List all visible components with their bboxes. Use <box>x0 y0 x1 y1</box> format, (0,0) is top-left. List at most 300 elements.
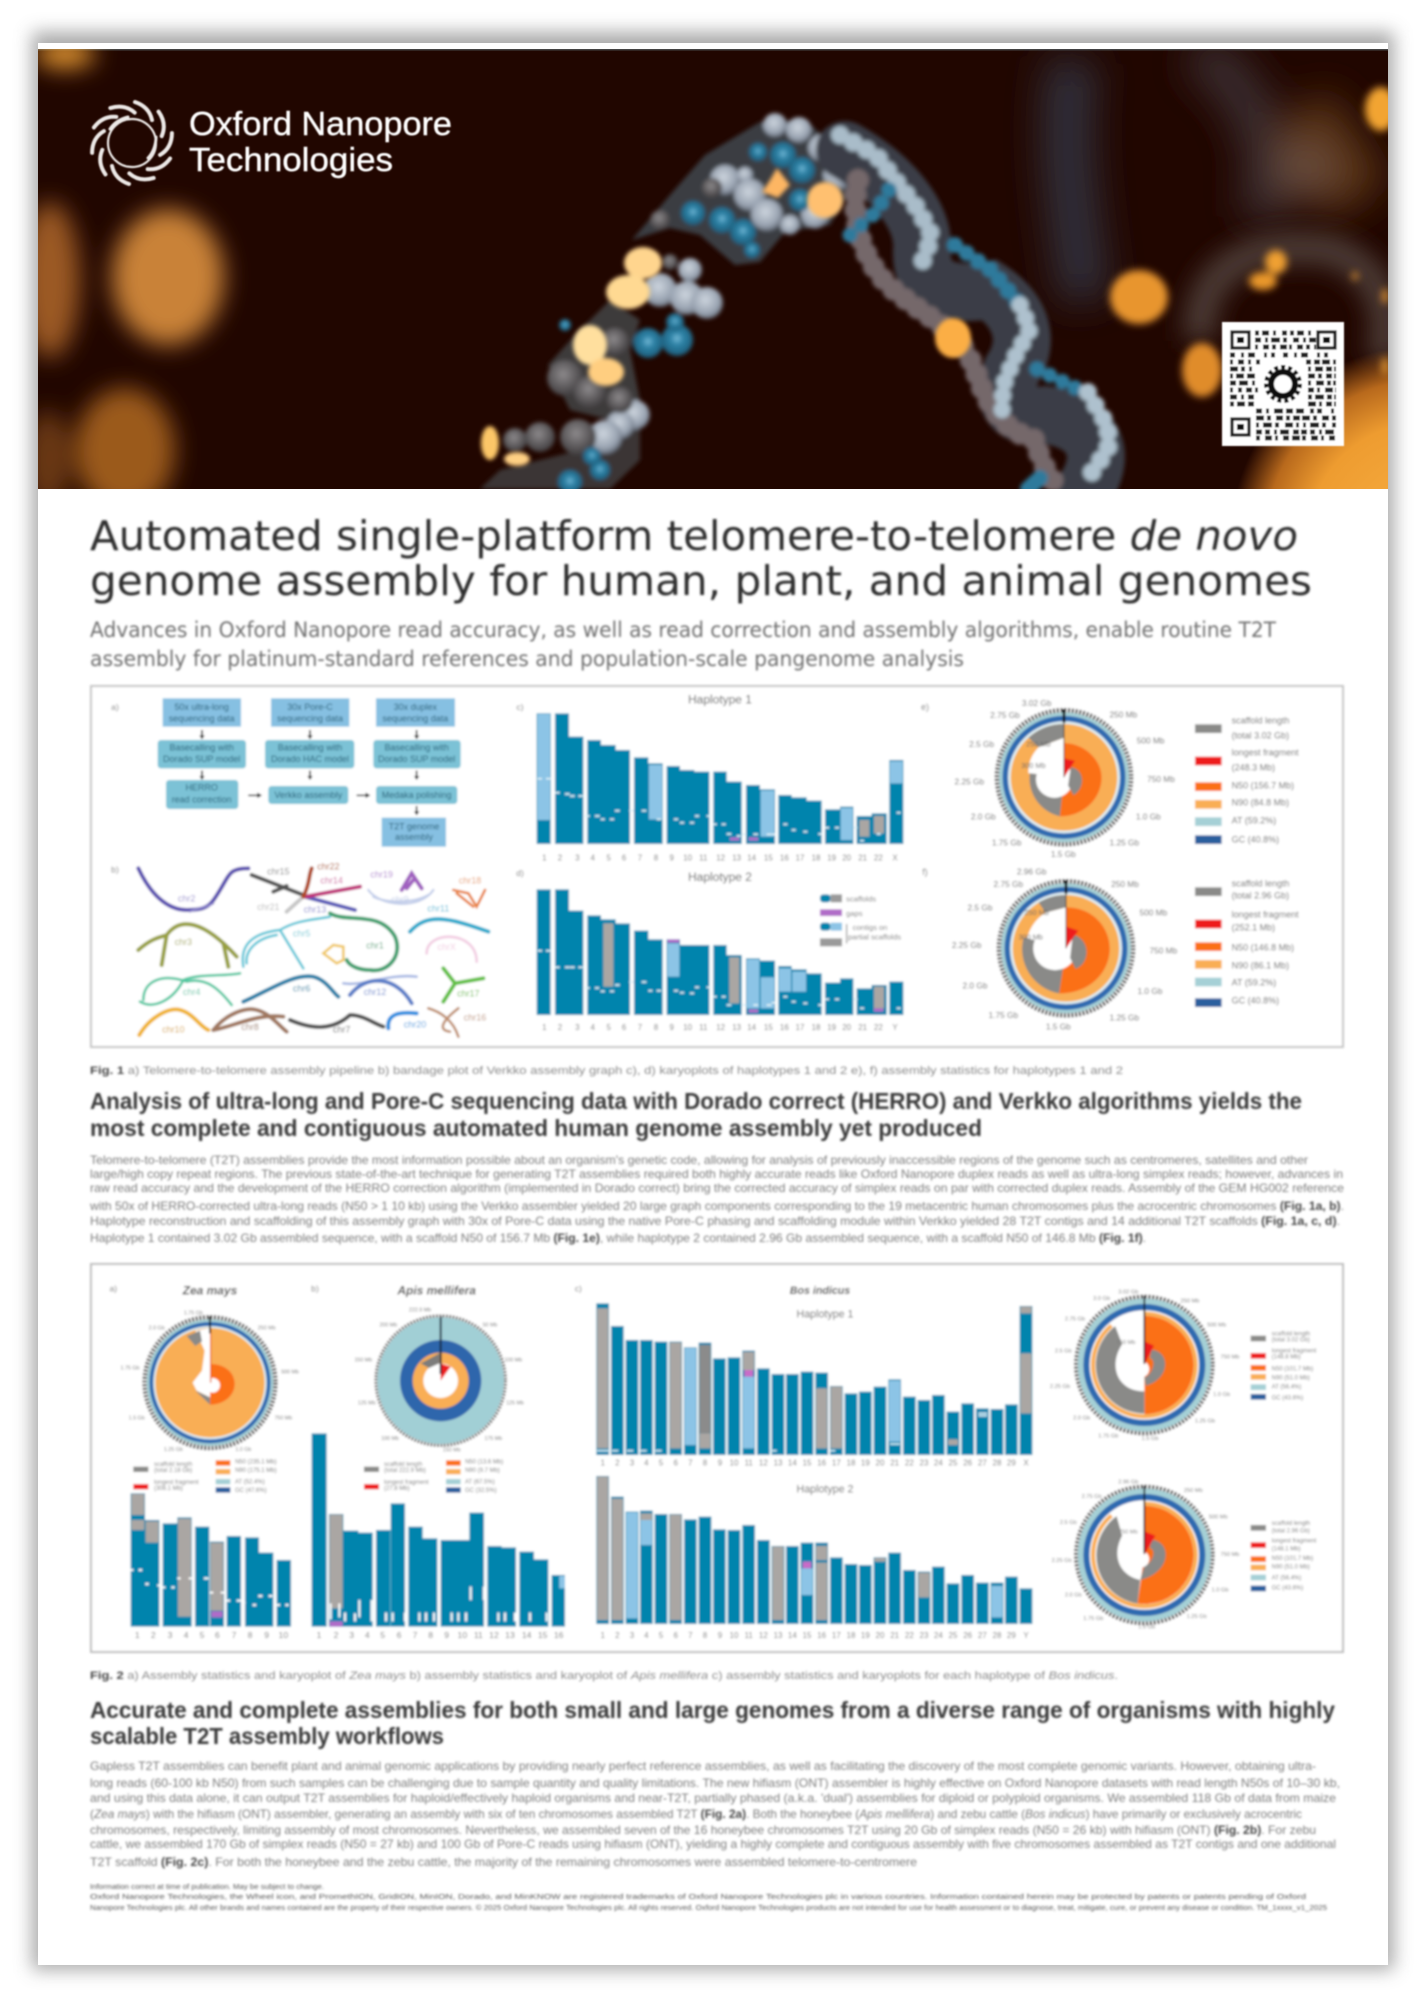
chart: karyoplot haplotype 1: 1 <box>542 854 547 863</box>
karyoplot Bos haplotype 2: 14 <box>788 1631 797 1640</box>
karyoplot Zea mays: 7 <box>232 1630 237 1640</box>
chart: karyoplot haplotype 2: 21 <box>858 1023 868 1032</box>
panel: Bos indicus snail plots: 2.0 Gb <box>1065 1593 1082 1599</box>
karyoplot Zea mays: 1 <box>135 1630 140 1640</box>
panel: Apis mellifera: b) <box>311 1284 319 1294</box>
chart: karyoplot haplotype 2: Y <box>892 1023 898 1032</box>
chart: karyoplot haplotype 2: 16 <box>780 1023 789 1032</box>
panel: Apis mellifera: 125 Mb <box>506 1401 524 1407</box>
chart: assembly statistics haplotype 1: 2.75 Gb <box>990 710 1020 720</box>
chart: karyoplot haplotype 2: Haplotype 2 <box>688 870 752 884</box>
chart: karyoplot haplotype 1 <box>516 692 903 863</box>
panel: Bos indicus snail plots: 250 Mb <box>1181 1299 1199 1305</box>
karyoplot Apis mellifera: 4 <box>365 1630 370 1640</box>
karyoplot legend: gaps <box>846 909 863 918</box>
legend Bos haplotype 2: (148.1 Mb) <box>1272 1547 1301 1553</box>
chart: karyoplot haplotype 1: X <box>892 854 898 863</box>
panel: figure 1 <box>91 686 1343 1047</box>
panel: Apis mellifera: 175 Mb <box>484 1436 502 1442</box>
panel: Bos indicus snail plots <box>1050 1289 1317 1631</box>
karyoplot Bos haplotype 2: 21 <box>890 1631 900 1640</box>
legend Bos haplotype 1: (148.8 Mb) <box>1272 1355 1301 1361</box>
panel: Apis mellifera: 100 Mb <box>504 1357 522 1363</box>
legend Apis mellifera: GC (32.5%) <box>465 1488 497 1494</box>
karyoplot Apis mellifera: 8 <box>428 1630 433 1640</box>
chart: assembly statistics haplotype 2: 2.5 Gb <box>967 902 993 912</box>
panel: Bos indicus snail plots: 3.02 Gb <box>1118 1289 1138 1295</box>
legend Bos haplotype 1: N90 (51.0 Mb) <box>1272 1375 1310 1381</box>
legend Apis mellifera: AT (67.5%) <box>465 1479 495 1485</box>
karyoplot Bos haplotype 2: 1 <box>600 1631 605 1640</box>
karyoplot Bos haplotype 2: Y <box>1023 1631 1029 1640</box>
panel: bandage plot: chr12 <box>364 987 386 997</box>
legend Bos haplotype 1: GC (43.6%) <box>1272 1395 1303 1401</box>
legend Zea mays: (308.1 Mb) <box>154 1486 183 1492</box>
panel: Apis mellifera: 100 Mb <box>381 1436 399 1442</box>
hero banner <box>38 49 1388 489</box>
karyoplot Bos haplotype 2: 27 <box>978 1631 987 1640</box>
panel: Bos indicus snail plots: 750 Mb <box>1119 1529 1138 1535</box>
legend Bos haplotype 1 <box>1251 1331 1317 1401</box>
legend haplotype 1: longest fragment <box>1232 748 1299 758</box>
section heading: diverse organisms: scalable T2T assembly workflows <box>90 1723 444 1749</box>
karyoplot Bos haplotype 1: 23 <box>920 1458 929 1467</box>
karyoplot Bos haplotype 2: 2 <box>615 1631 620 1640</box>
karyoplot Bos haplotype 1: 3 <box>630 1458 635 1467</box>
chart: assembly statistics haplotype 1: 750 Mb <box>1147 774 1175 784</box>
snail plot Bos haplotype 2 <box>1076 1486 1212 1623</box>
legend haplotype 1: N50 (156.7 Mb) <box>1232 780 1294 790</box>
karyoplot Bos haplotype 1: 19 <box>861 1458 870 1467</box>
DNA helix <box>480 113 1108 494</box>
karyoplot Zea mays: 9 <box>264 1630 269 1640</box>
karyoplot Zea mays <box>129 1493 291 1640</box>
panel: Apis mellifera: 150 Mb <box>354 1357 372 1363</box>
chart: assembly statistics haplotype 2: 250 Mb <box>1024 908 1049 917</box>
karyoplot Bos haplotype 2: 11 <box>745 1631 753 1640</box>
karyoplot legend: contigs on <box>853 923 888 932</box>
chart: assembly statistics haplotype 2: 1.0 Gb <box>1137 986 1163 996</box>
chart: assembly statistics haplotype 2 <box>952 867 1299 1032</box>
karyoplot Bos haplotype 1: 16 <box>817 1458 827 1467</box>
karyoplot Zea mays: 4 <box>184 1630 189 1640</box>
panel: bandage plot: chr13 <box>304 905 326 915</box>
body text: diverse organisms: and using this data alone, it can output T2T assemblies for haploid/effectively haploid organisms and near-T2T, partially phased (a.k.a. 'dual') assemblies for diploid or polyploid organisms. We assembled 118 Gb of data from maize <box>90 1791 1336 1805</box>
bokeh lights <box>20 40 224 512</box>
legend haplotype 2 <box>1195 879 1299 1007</box>
chart: karyoplot haplotype 2: 1 <box>542 1023 547 1032</box>
panel: Bos indicus snail plots: 2.5 Gb <box>1055 1349 1072 1355</box>
snail plot haplotype 2 <box>999 880 1133 1015</box>
chart: karyoplot haplotype 2: 3 <box>575 1023 580 1032</box>
karyoplot Bos haplotype 2 <box>596 1476 1032 1640</box>
helix body shadow <box>632 120 850 265</box>
body text: diverse organisms: (Zea mays) with the hifiasm (ONT) assembler, generating an assembly with six of ten chromosomes assembled T2T (Fig. 2a). Both the honeybee (Apis mellifera) and zebu cattle (Bos indicus) have primarily or exclusively acrocentric <box>90 1807 1302 1821</box>
legend Zea mays: longest fragment <box>154 1480 199 1486</box>
chart: karyoplot haplotype 1: 9 <box>669 854 674 863</box>
karyoplot Bos haplotype 1: 24 <box>934 1458 943 1467</box>
panel: bandage plot: b) <box>111 865 119 875</box>
karyoplot Bos haplotype 1: 8 <box>703 1458 708 1467</box>
chart: karyoplot haplotype 2: 20 <box>842 1023 852 1032</box>
chart: karyoplot haplotype 2: 4 <box>590 1023 595 1032</box>
karyoplot Bos haplotype 2: 22 <box>905 1631 914 1640</box>
karyoplot legend: partial scaffolds <box>848 932 901 941</box>
chart: assembly statistics haplotype 1: 1.5 Gb <box>1051 849 1076 859</box>
panel: Apis mellifera: 150 Mb <box>443 1447 461 1453</box>
body text: diverse organisms: Gapless T2T assemblies can benefit plant and animal genomic applications by providing nearly perfect reference assemblies, as well as facilitating the discovery of the most complete genomic variants. However, obtaining ultra- <box>90 1759 1316 1773</box>
panel: Bos indicus snail plots: 1.75 Gb <box>1098 1434 1118 1440</box>
legend haplotype 1: AT (59.2%) <box>1232 815 1276 825</box>
subtitle: assembly for platinum-standard references and population-scale pangenome analysis <box>90 647 964 671</box>
panel: Bos indicus snail plots: 2.75 Gb <box>1065 1317 1085 1323</box>
legend haplotype 1 <box>1195 715 1299 845</box>
karyoplot Bos haplotype 2: 17 <box>832 1631 841 1640</box>
legend haplotype 1: (total 3.02 Gb) <box>1232 730 1289 740</box>
legend Apis mellifera: (27.8 Mb) <box>384 1486 410 1492</box>
legend haplotype 2: longest fragment <box>1232 910 1299 920</box>
panel: bandage plot: chr3 <box>175 937 192 947</box>
chart: karyoplot haplotype 1: 15 <box>764 854 773 863</box>
panel: assembly pipeline flowchart: Basecalling with <box>384 743 449 753</box>
panel: bandage plot: chr18 <box>459 875 481 885</box>
karyoplot Bos haplotype 2: 7 <box>688 1631 693 1640</box>
body text: human genome assembly: raw read accuracy and the development of the HERRO correction algorithm (implemented in Dorado correct) bring the corrected accuracy of simplex reads on par with corrected duplex reads. Assembly of the GEM HG002 reference <box>90 1181 1344 1195</box>
panel: Zea mays: 1.75 Gb <box>184 1310 203 1316</box>
panel: Bos indicus snail plots: 1.5 Gb <box>1138 1625 1155 1631</box>
logo <box>87 98 452 188</box>
panel: Bos indicus snail plots: 1.0 Gb <box>1212 1587 1228 1593</box>
snail plot haplotype 1 <box>997 709 1131 844</box>
karyoplot Bos haplotype 2: 23 <box>920 1631 929 1640</box>
karyoplot Apis mellifera: 1 <box>317 1630 322 1640</box>
karyoplot Bos haplotype 2: 16 <box>817 1631 827 1640</box>
body text: diverse organisms: long reads (60-100 kb N50) from such samples can be challenging due to sample quantity and quality limitations. The new hifiasm (ONT) assembler is highly effective on Oxford Nanopore datasets with read length N50s of 10–30 kb, <box>90 1776 1340 1790</box>
snail plot Apis mellifera <box>376 1316 505 1445</box>
panel: assembly pipeline flowchart: HERRO <box>185 783 218 793</box>
karyoplot Bos haplotype 1: 28 <box>993 1458 1002 1467</box>
legend Bos haplotype 1: N50 (101.7 Mb) <box>1272 1367 1313 1373</box>
chart: karyoplot haplotype 1: 7 <box>638 854 643 863</box>
logo wordmark: Technologies <box>189 141 393 178</box>
legend Bos haplotype 2: scaffold length <box>1272 1521 1310 1527</box>
karyoplot legend <box>820 894 901 946</box>
chart: karyoplot haplotype 1: 20 <box>842 854 852 863</box>
panel: Bos indicus snail plots: 1.0 Gb <box>1213 1392 1230 1398</box>
karyoplot Bos haplotype 2: 9 <box>718 1631 723 1640</box>
karyoplot Bos haplotype 1: 7 <box>688 1458 693 1467</box>
body text: human genome assembly: Haplotype 1 contained 3.02 Gb assembled sequence, with a scaffold N50 of 156.7 Mb (Fig. 1e), while haplotype 2 contained 2.96 Gb assembled sequence, with a scaffold N50 of 146.8 Mb (Fig. 1f). <box>90 1231 1146 1245</box>
panel: Apis mellifera: 50 Mb <box>483 1323 497 1329</box>
panel: assembly pipeline flowchart: Dorado HAC model <box>271 754 349 764</box>
panel: Bos indicus snail plots: 1.25 Gb <box>1187 1614 1207 1620</box>
chart: assembly statistics haplotype 1: 250 Mb <box>1026 739 1051 748</box>
panel: Zea mays: 1.75 Gb <box>121 1365 140 1371</box>
chart: karyoplot haplotype 1: 8 <box>654 854 659 863</box>
legend haplotype 1: scaffold length <box>1232 715 1289 725</box>
karyoplot Bos haplotype 1: 5 <box>659 1458 664 1467</box>
legend haplotype 2: (252.1 Mb) <box>1232 923 1275 933</box>
panel: bandage plot: chr2 <box>178 893 195 903</box>
snail plot Zea mays <box>145 1316 275 1448</box>
karyoplot Apis mellifera: 5 <box>380 1630 385 1640</box>
panel: assembly pipeline flowchart: Medaka polishing <box>382 790 452 800</box>
karyoplot Bos haplotype 1: 18 <box>847 1458 856 1467</box>
panel: assembly pipeline flowchart: Verkko assembly <box>274 790 343 800</box>
chart: karyoplot haplotype 2: 17 <box>796 1023 805 1032</box>
QR code <box>1222 322 1344 446</box>
chart: karyoplot haplotype 2: 12 <box>716 1023 726 1032</box>
panel: bandage plot: chr14 <box>320 875 343 885</box>
panel: Zea mays: 750 Mb <box>274 1415 292 1421</box>
legend Bos haplotype 1: AT (56.4%) <box>1272 1385 1301 1391</box>
legend Apis mellifera <box>364 1459 503 1494</box>
karyoplot Bos haplotype 1: 4 <box>644 1458 649 1467</box>
legend Bos haplotype 1: (total 3.02 Gb) <box>1272 1337 1310 1343</box>
chart: karyoplot haplotype 1: 14 <box>747 854 757 863</box>
karyoplot Bos haplotype 1: 29 <box>1007 1458 1016 1467</box>
panel: Bos indicus snail plots: 2.25 Gb <box>1050 1384 1070 1390</box>
legend Zea mays: AT (52.4%) <box>235 1479 265 1485</box>
chart: karyoplot haplotype 1: 17 <box>796 854 805 863</box>
chart: karyoplot haplotype 2: 5 <box>606 1023 611 1032</box>
karyoplot Bos haplotype 2: 10 <box>730 1631 739 1640</box>
chart: karyoplot haplotype 1: 13 <box>732 854 742 863</box>
panel: bandage plot: chr17 <box>457 989 480 999</box>
legend Bos haplotype 1: longest fragment <box>1272 1349 1317 1355</box>
karyoplot Apis mellifera: 6 <box>397 1630 402 1640</box>
karyoplot Bos haplotype 1: 21 <box>890 1458 900 1467</box>
panel: Zea mays: 500 Mb <box>281 1369 299 1375</box>
chart: assembly statistics haplotype 1: 500 Mb <box>1137 736 1165 746</box>
chart: karyoplot haplotype 2 <box>516 868 903 1032</box>
panel: Bos indicus snail plots: 750 Mb <box>1221 1354 1239 1360</box>
karyoplot Bos haplotype 2: 6 <box>673 1631 678 1640</box>
karyoplot Apis mellifera: 15 <box>538 1630 548 1640</box>
legend Apis mellifera: (total 222.9 Mb) <box>384 1468 426 1474</box>
legend Apis mellifera: N50 (13.6 Mb) <box>465 1459 503 1465</box>
karyoplot Apis mellifera: 2 <box>334 1630 339 1640</box>
chart: karyoplot haplotype 1: 19 <box>827 854 837 863</box>
panel: assembly pipeline flowchart: sequencing data <box>169 713 235 723</box>
chart: assembly statistics haplotype 1: 1.25 Gb <box>1110 837 1140 847</box>
chart: karyoplot haplotype 2: 14 <box>747 1023 757 1032</box>
section heading: diverse organisms: Accurate and complete assemblies for both small and large genomes from a diverse range of organisms with highly <box>90 1697 1335 1723</box>
panel: Zea mays: 1.5 Gb <box>129 1415 145 1421</box>
panel: Bos indicus snail plots: 1.5 Gb <box>1142 1436 1158 1442</box>
legend Zea mays: GC (47.6%) <box>235 1488 267 1494</box>
panel: assembly pipeline flowchart: read correction <box>172 795 232 805</box>
panel: assembly pipeline flowchart: assembly <box>395 832 433 842</box>
karyoplot Apis mellifera: 7 <box>413 1630 418 1640</box>
panel: bandage plot: chr19 <box>370 870 393 880</box>
panel: bandage plot: chr9 <box>391 895 409 905</box>
chart: assembly statistics haplotype 2: 250 Mb <box>1111 879 1139 889</box>
chart: karyoplot haplotype 1: 11 <box>699 854 708 863</box>
panel: Bos indicus karyoplots: Bos indicus <box>790 1285 850 1297</box>
karyoplot Bos haplotype 2: 25 <box>949 1631 958 1640</box>
karyoplot Bos haplotype 1: 12 <box>759 1458 768 1467</box>
karyoplot Bos haplotype 2: 20 <box>876 1631 885 1640</box>
karyoplot Zea mays: 8 <box>248 1630 253 1640</box>
chart: assembly statistics haplotype 2: 2.96 Gb <box>1017 867 1047 877</box>
karyoplot Bos haplotype 2: 13 <box>774 1631 783 1640</box>
footer legal text: Information correct at time of publication. May be subject to change. <box>90 1884 324 1891</box>
panel: assembly pipeline flowchart: 30x duplex <box>394 702 438 712</box>
chart: karyoplot haplotype 1: 12 <box>716 854 726 863</box>
panel: assembly pipeline flowchart: sequencing data <box>382 713 448 723</box>
karyoplot Bos haplotype 1: 22 <box>905 1458 914 1467</box>
panel: Zea mays: a) <box>109 1284 117 1294</box>
panel: Zea mays <box>109 1284 299 1640</box>
panel: Bos indicus snail plots: 750 Mb <box>1221 1552 1239 1558</box>
legend Apis mellifera: scaffold length <box>384 1462 422 1468</box>
karyoplot Apis mellifera: 12 <box>489 1630 499 1640</box>
body text: diverse organisms: chromosomes, respectively, limiting assembly of most chromosomes. Nevertheless, we assembled seven of the 16 honeybee chromosomes T2T using 20 Gb of simplex reads (N50 = 26 kb) with hifiasm (ONT) (Fig. 2b). For zebu <box>90 1823 1316 1837</box>
chart: karyoplot haplotype 2: 19 <box>827 1023 837 1032</box>
panel: Bos indicus snail plots: 250 Mb <box>1184 1488 1203 1494</box>
karyoplot Apis mellifera <box>312 1433 565 1640</box>
panel: Bos indicus snail plots: 3.0 Gb <box>1093 1296 1110 1302</box>
panel: assembly pipeline flowchart: sequencing data <box>277 713 343 723</box>
chart: assembly statistics haplotype 1: 1.0 Gb <box>1136 812 1161 822</box>
legend Zea mays: (total 2.18 Gb) <box>154 1468 192 1474</box>
panel: Zea mays: 250 Mb <box>258 1325 276 1331</box>
panel: bandage plot: chr20 <box>404 1020 426 1030</box>
logo wordmark: Oxford Nanopore <box>189 105 452 142</box>
body text: diverse organisms: cattle, we assembled 170 Gb of simplex reads (N50 = 27 kb) and 100 Gb of Pore-C reads using hifiasm (ONT), yielding a highly complete and contiguous assembly with five chromosomes assembled as T2T contigs and one additional <box>90 1837 1336 1851</box>
legend haplotype 2: GC (40.8%) <box>1232 995 1279 1005</box>
karyoplot Apis mellifera: 14 <box>522 1630 532 1640</box>
chart: assembly statistics haplotype 2: 1.25 Gb <box>1110 1012 1140 1022</box>
panel: Bos indicus snail plots: 1.25 Gb <box>1195 1419 1215 1425</box>
karyoplot Bos haplotype 1: 17 <box>832 1458 841 1467</box>
logo mark <box>87 98 177 188</box>
panel: bandage plot: chr16 <box>464 1013 486 1023</box>
chart: karyoplot haplotype 2: 2 <box>558 1023 563 1032</box>
chart: karyoplot haplotype 1: 6 <box>622 854 627 863</box>
chart: karyoplot haplotype 2: 8 <box>654 1023 659 1032</box>
legend Bos haplotype 1: scaffold length <box>1272 1331 1310 1337</box>
panel: figure 2 <box>91 1264 1343 1652</box>
karyoplot Bos haplotype 1: 26 <box>963 1458 973 1467</box>
legend Bos haplotype 2: AT (56.4%) <box>1272 1575 1301 1581</box>
karyoplot Bos haplotype 2: 4 <box>644 1631 649 1640</box>
chart: karyoplot haplotype 2: 15 <box>764 1023 773 1032</box>
figure 2 caption: Fig. 2 a) Assembly statistics and karyoplot of Zea mays b) assembly statistics and karyoplot of Apis mellifera c) assembly statistics and karyoplots for each haplotype of Bos indicus . <box>90 1670 1118 1682</box>
chart: assembly statistics haplotype 2: 2.0 Gb <box>962 981 988 991</box>
karyoplot Zea mays: 6 <box>215 1630 220 1640</box>
chart: karyoplot haplotype 1: 4 <box>590 854 595 863</box>
legend haplotype 2: scaffold length <box>1232 879 1289 889</box>
karyoplot Bos haplotype 2: 19 <box>861 1631 870 1640</box>
karyoplot Bos haplotype 2: 28 <box>993 1631 1002 1640</box>
panel: Bos indicus snail plots: 2.0 Gb <box>1073 1415 1090 1421</box>
panel: Zea mays: Zea mays <box>182 1284 238 1298</box>
title <box>90 512 1312 605</box>
chart: karyoplot haplotype 1: 5 <box>606 854 611 863</box>
panel: Zea mays: 2.0 Gb <box>149 1325 165 1331</box>
legend Bos haplotype 2: GC (43.6%) <box>1272 1585 1303 1591</box>
karyoplot Apis mellifera: 11 <box>474 1630 483 1640</box>
body text: human genome assembly: large/high copy repeat regions. The previous state-of-the-art technique for generating T2T assemblies required both highly accurate reads like Oxford Nanopore duplex reads as well as ultra-long simplex reads; however, advances in <box>90 1167 1343 1181</box>
panel: Bos indicus snail plots: 1.75 Gb <box>1083 1616 1103 1622</box>
karyoplot Apis mellifera: 9 <box>444 1630 449 1640</box>
panel: assembly pipeline flowchart: Basecalling with <box>169 743 234 753</box>
karyoplot Zea mays: 10 <box>279 1630 288 1640</box>
karyoplot Apis mellifera: 10 <box>458 1630 467 1640</box>
panel: bandage plot: chr7 <box>333 1025 350 1035</box>
karyoplot Bos haplotype 1: 27 <box>978 1458 987 1467</box>
body text: diverse organisms: T2T scaffold (Fig. 2c). For both the honeybee and the zebu cattle, the majority of the remaining chromosomes were assembled telomere-to-centromere <box>90 1855 917 1869</box>
karyoplot Bos haplotype 2: Haplotype 2 <box>797 1483 854 1495</box>
chart: karyoplot haplotype 2: 22 <box>874 1023 883 1032</box>
footer legal text <box>90 1884 1327 1912</box>
body text: human genome assembly: with 50x of HERRO-corrected ultra-long reads (N50 > 1 10 kb) using the Verkko assembler yielded 20 large graph components corresponding to the 19 metacentric human chromosomes plus the acrocentric chromosomes (Fig. 1a, b). <box>89 1199 1344 1213</box>
panel: Bos indicus snail plots: 2.75 Gb <box>1082 1494 1102 1500</box>
panel: assembly pipeline flowchart: T2T genome <box>389 821 439 831</box>
panel: bandage plot: chr21 <box>257 902 280 912</box>
chart: karyoplot haplotype 2: 7 <box>638 1023 643 1032</box>
panel: bandage plot: chr6 <box>293 984 310 994</box>
karyoplot Zea mays: 5 <box>200 1630 205 1640</box>
karyoplot Bos haplotype 1: 11 <box>745 1458 753 1467</box>
chart: assembly statistics haplotype 1: 2.25 Gb <box>955 777 985 787</box>
karyoplot Bos haplotype 2: 12 <box>759 1631 768 1640</box>
panel: assembly pipeline flowchart: 50x ultra-long <box>174 702 229 712</box>
legend haplotype 2: N90 (86.1 Mb) <box>1232 960 1289 970</box>
legend haplotype 1: GC (40.8%) <box>1232 835 1279 845</box>
legend Zea mays: N50 (235.1 Mb) <box>235 1459 277 1465</box>
panel: bandage plot: chr5 <box>293 929 310 939</box>
chart: assembly statistics haplotype 1: 2.0 Gb <box>971 812 996 822</box>
karyoplot Bos haplotype 2: 3 <box>630 1631 635 1640</box>
panel: Bos indicus snail plots: 750 Mb <box>1117 1340 1135 1346</box>
legend Bos haplotype 2: (total 2.96 Gb) <box>1272 1528 1310 1534</box>
chart: karyoplot haplotype 1: 16 <box>780 854 789 863</box>
chart: assembly statistics haplotype 1 <box>955 698 1299 859</box>
panel: assembly pipeline flowchart: a) <box>111 702 119 712</box>
chart: assembly statistics haplotype 1: 3.02 Gb <box>1022 698 1052 708</box>
karyoplot Bos haplotype 2: 8 <box>703 1631 708 1640</box>
panel: bandage plot: chr10 <box>162 1025 185 1035</box>
karyoplot Bos haplotype 2: 29 <box>1007 1631 1016 1640</box>
karyoplot Bos haplotype 2: 5 <box>659 1631 664 1640</box>
karyoplot Bos haplotype 2: 15 <box>803 1631 812 1640</box>
chart: karyoplot haplotype 1: 10 <box>683 854 693 863</box>
panel: Bos indicus snail plots: 500 Mb <box>1209 1515 1228 1521</box>
karyoplot Apis mellifera: 13 <box>505 1630 515 1640</box>
chart: karyoplot haplotype 2: 13 <box>732 1023 742 1032</box>
karyoplot Bos haplotype 1: 13 <box>774 1458 783 1467</box>
panel: Zea mays: 1.0 Gb <box>235 1447 251 1453</box>
panel: Bos indicus karyoplots <box>575 1284 1032 1640</box>
subtitle: Advances in Oxford Nanopore read accuracy, as well as read correction and assembly algorithms, enable routine T2T <box>90 618 1276 642</box>
chart: assembly statistics haplotype 1: 2.5 Gb <box>969 739 995 749</box>
body text: human genome assembly <box>89 1153 1344 1245</box>
panel: assembly pipeline flowchart: Dorado SUP model <box>163 754 240 764</box>
figure 1 caption: Fig. 1 a) Telomere-to-telomere assembly pipeline b) bandage plot of Verkko assembly graph c), d) karyoplots of haplotypes 1 and 2 e), f) assembly statistics for haplotypes 1 and 2 <box>90 1065 1123 1077</box>
panel: Apis mellifera: 222.9 Mb <box>409 1307 431 1313</box>
panel: Apis mellifera <box>311 1284 565 1640</box>
chart: karyoplot haplotype 1: 22 <box>874 854 883 863</box>
footer legal text: Nanopore Technologies plc. All other brands and names contained are the property of their respective owners. © 2025 Oxford Nanopore Technologies plc. All rights reserved. Oxford Nanopore Technologies products are not intended for use for health assessment or to diagnose, treat, mitigate, cure, or prevent any disease or condition. TM_1xxxx_v1_2025 <box>90 1904 1327 1912</box>
background out-of-focus helix <box>1068 50 1360 300</box>
karyoplot Bos haplotype 2: 24 <box>934 1631 943 1640</box>
karyoplot Bos haplotype 1: 10 <box>730 1458 739 1467</box>
chart: assembly statistics haplotype 1: 1.75 Gb <box>992 837 1022 847</box>
chart: karyoplot haplotype 1: 21 <box>858 854 868 863</box>
